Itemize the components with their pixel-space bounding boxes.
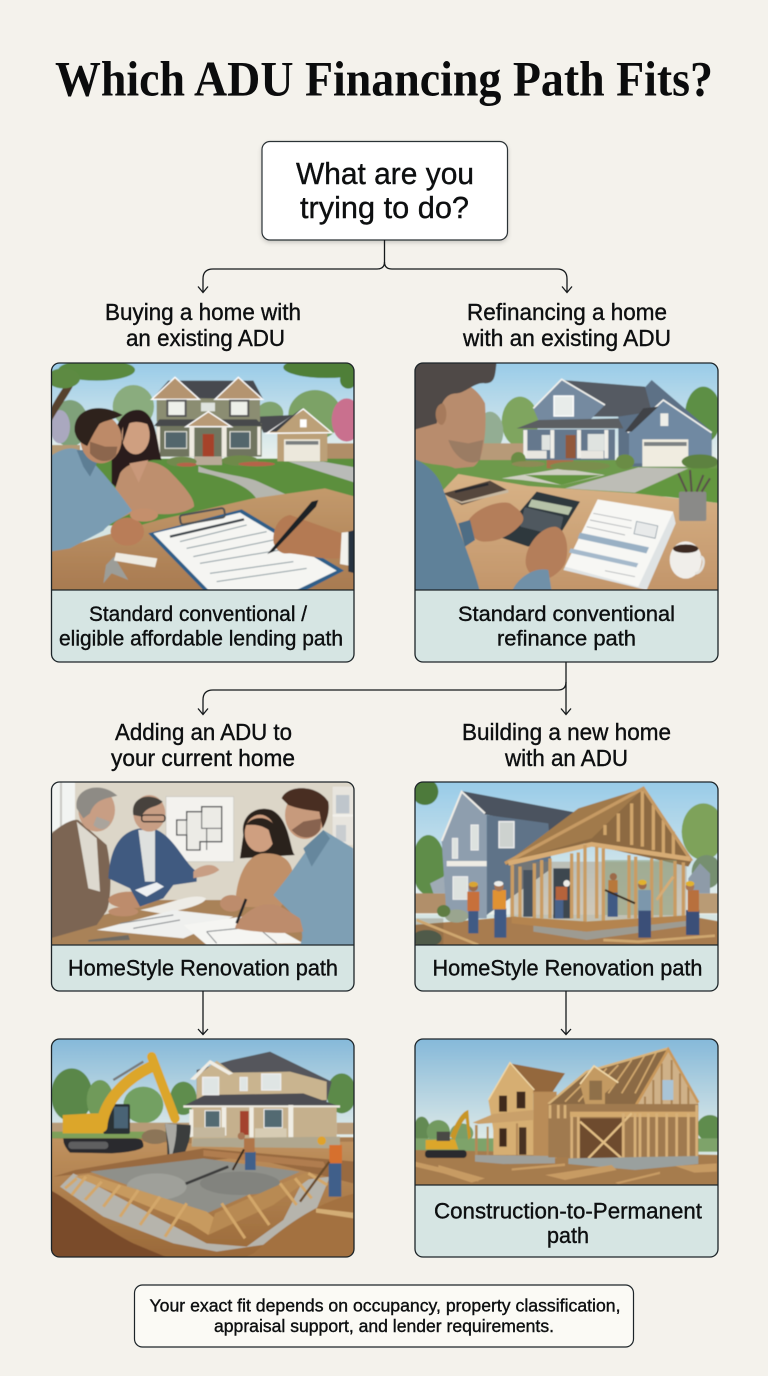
heading: adding an ADU: your current home xyxy=(111,745,295,771)
arrow: refinancing continues to adding and building xyxy=(198,662,571,714)
heading: refinancing xyxy=(462,299,671,351)
heading: buying: an existing ADU xyxy=(126,325,285,351)
panel: building a new home xyxy=(412,778,725,991)
question box xyxy=(262,142,508,240)
caption: Construction-to-Permanent: path xyxy=(547,1223,589,1248)
panel: buying path xyxy=(47,357,370,662)
footnote box xyxy=(134,1285,634,1347)
panel: foundation and excavator xyxy=(50,1037,357,1260)
caption: standard conventional refinance: Standard conventional xyxy=(458,602,675,626)
heading: building a new home xyxy=(462,719,671,771)
caption: HomeStyle Renovation: HomeStyle Renovation path xyxy=(68,956,338,980)
illustration: new home framing with excavator xyxy=(413,1037,723,1187)
illustration: couple reviewing blueprints with contractors xyxy=(50,781,355,945)
heading: buying: Buying a home with xyxy=(105,299,301,325)
caption: Construction-to-Permanent xyxy=(434,1198,703,1248)
heading: refinancing: Refinancing a home xyxy=(467,299,667,325)
caption: standard conventional refinance: refinance path xyxy=(497,626,636,650)
illustration: crew framing ADU beside house xyxy=(412,778,725,947)
caption: standard conventional or affordable lending xyxy=(59,602,343,650)
arrow: building to construction-to-permanent xyxy=(561,991,571,1034)
caption: standard conventional or affordable lending: Standard conventional / xyxy=(89,602,307,626)
illustration: couple signing mortgage application xyxy=(52,364,354,590)
heading: adding an ADU xyxy=(111,719,295,771)
caption: HomeStyle Renovation: HomeStyle Renovation path xyxy=(432,956,702,980)
heading: building a new home: with an ADU xyxy=(504,745,628,771)
question box: trying to do? xyxy=(300,190,469,225)
question box: What are you xyxy=(296,156,474,191)
panel: adding an ADU xyxy=(50,781,355,991)
heading: adding an ADU: Adding an ADU to xyxy=(115,719,292,745)
panel: refinancing path xyxy=(413,362,722,662)
illustration: excavator pouring ADU foundation beside house xyxy=(50,1037,357,1260)
illustration: homeowner with calculator and mortgage papers xyxy=(413,362,722,592)
arrow: question splits to buying and refinancing xyxy=(198,240,572,292)
footnote box: Your exact fit depends on occupancy, property classification, xyxy=(150,1296,620,1316)
caption: Construction-to-Permanent: Construction-to-Permanent xyxy=(434,1198,703,1224)
footnote box: appraisal support, and lender requirements. xyxy=(214,1316,554,1336)
caption: standard conventional or affordable lending: eligible affordable lending path xyxy=(59,626,343,650)
arrow: adding to foundation scene xyxy=(198,991,208,1034)
heading: building a new home: Building a new home xyxy=(462,719,671,745)
panel: construction-to-permanent xyxy=(413,1037,723,1257)
title: Which ADU Financing Path Fits? xyxy=(55,50,713,106)
heading: refinancing: with an existing ADU xyxy=(462,325,671,351)
heading: buying xyxy=(105,299,301,351)
caption: standard conventional refinance xyxy=(458,602,675,650)
